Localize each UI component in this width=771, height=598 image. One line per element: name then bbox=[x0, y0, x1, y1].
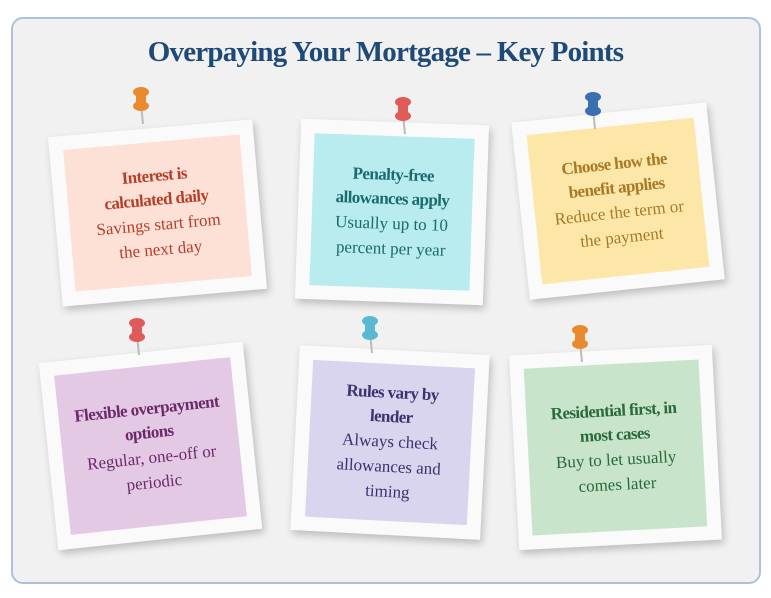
note: residential: comes later bbox=[578, 472, 657, 495]
note: flexible: Flexible overpayment bbox=[73, 392, 220, 426]
note: interest daily: calculated daily bbox=[104, 186, 209, 214]
note: flexible: periodic bbox=[126, 470, 183, 495]
note: flexible bbox=[39, 342, 262, 550]
note: penalty-free: allowances apply bbox=[335, 187, 450, 210]
note: choose benefit: benefit applies bbox=[568, 173, 665, 202]
note: rules vary: Always check bbox=[342, 430, 438, 453]
note: choose benefit: Choose how the bbox=[560, 149, 668, 179]
note: rules vary: lender bbox=[370, 406, 413, 427]
note: flexible: Regular, one-off or bbox=[86, 441, 217, 474]
note: residential: Residential first, in bbox=[550, 397, 677, 423]
note: choose benefit bbox=[511, 102, 725, 300]
note: interest daily: Interest is bbox=[121, 163, 188, 188]
note: choose benefit: the payment bbox=[579, 223, 664, 251]
note: choose benefit: Reduce the term or bbox=[554, 196, 685, 229]
title: Overpaying Your Mortgage – Key Points bbox=[148, 36, 623, 68]
icon: orange pin bbox=[133, 87, 149, 124]
note: residential bbox=[509, 345, 722, 550]
note: interest daily: the next day bbox=[118, 236, 203, 262]
icon: cyan pin bbox=[362, 316, 378, 353]
note: penalty-free: percent per year bbox=[336, 237, 446, 260]
note: residential: Buy to let usually bbox=[555, 446, 677, 472]
note: interest daily bbox=[48, 119, 267, 307]
note: rules vary: allowances and bbox=[336, 454, 441, 479]
note: interest daily: Savings start from bbox=[96, 210, 221, 239]
note: rules vary: timing bbox=[365, 481, 410, 502]
icon: blue pin bbox=[585, 92, 601, 129]
note: penalty-free: Usually up to 10 bbox=[335, 212, 448, 235]
icon: orange pin 2 bbox=[572, 325, 588, 362]
note: penalty-free: Penalty-free bbox=[352, 164, 434, 185]
icon: red pin bbox=[395, 97, 411, 134]
note: rules vary bbox=[290, 345, 490, 540]
note: flexible: options bbox=[124, 421, 174, 445]
note: penalty-free bbox=[295, 119, 489, 305]
note: rules vary: Rules vary by bbox=[346, 381, 439, 404]
note: residential: most cases bbox=[579, 423, 650, 445]
icon: red pin 2 bbox=[129, 318, 145, 355]
